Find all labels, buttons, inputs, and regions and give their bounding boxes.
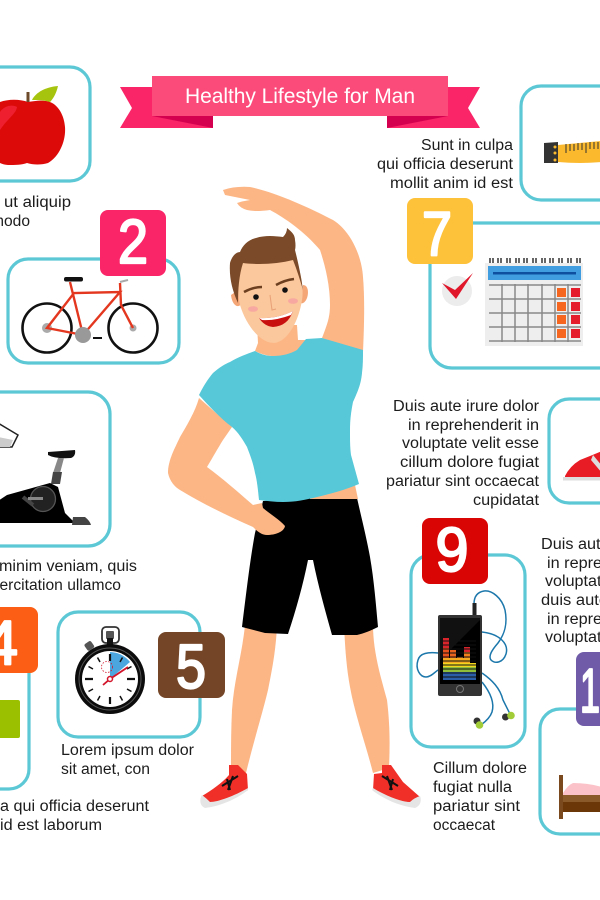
text: sneaker caption: cupidatat (473, 492, 540, 509)
legs (231, 625, 277, 773)
text: tape caption (377, 137, 514, 192)
panel: sneaker (549, 399, 600, 503)
lowered arm (168, 398, 285, 535)
title banner: Healthy Lifestyle for Man (185, 85, 415, 108)
badge: 7 (407, 198, 473, 269)
badge: 9 (422, 516, 488, 585)
man figure (168, 187, 421, 808)
text: exercise bike caption (0, 558, 137, 594)
text: tape caption: mollit anim id est (390, 175, 514, 192)
icon: earphone cable (417, 591, 510, 725)
left sneaker (200, 765, 248, 808)
text: right edge caption (541, 536, 600, 646)
head (230, 228, 308, 343)
panel: apple (0, 67, 90, 181)
text: music caption: pariatur sint (433, 798, 521, 815)
icon: calendar sheet (485, 258, 583, 346)
badge: 2: 2 (118, 208, 148, 277)
text: apple caption (0, 194, 71, 230)
panel: stopwatch (58, 612, 200, 737)
text: tape caption: Sunt in culpa (421, 137, 513, 154)
neck (255, 325, 306, 356)
text: music caption: Cillum dolore (433, 760, 527, 777)
shorts (242, 497, 378, 635)
title banner (120, 76, 480, 128)
panel: food (0, 620, 29, 789)
badge: 2 (100, 208, 166, 277)
text: food caption: a qui officia deserunt (0, 798, 150, 815)
badge: 9: 9 (436, 516, 468, 585)
text: exercise bike caption: minim veniam, quis (0, 558, 137, 575)
text: sneaker caption (386, 398, 540, 509)
text: sneaker caption: Duis aute irure dolor (393, 398, 539, 415)
panel: bicycle (8, 259, 179, 363)
text: music caption: fugiat nulla (433, 779, 512, 796)
text: food caption (0, 798, 150, 834)
text: tape caption: qui officia deserunt (377, 156, 514, 173)
icon: earbuds (474, 712, 515, 729)
text: sneaker caption: voluptate velit esse (402, 435, 539, 452)
icon: equalizer (443, 638, 476, 680)
badge: 5 (158, 632, 225, 702)
icon: phone (438, 603, 482, 696)
badge: 5: 5 (176, 633, 206, 702)
panel: music player (411, 555, 525, 747)
badge: 4 (0, 607, 38, 678)
text: sneaker caption: cillum dolore fugiat (400, 454, 540, 471)
text: apple caption: ut aliquip (4, 194, 71, 211)
text: stopwatch caption (61, 742, 194, 778)
text: music caption (433, 760, 527, 834)
waist (310, 485, 358, 499)
text: sneaker caption: pariatur sint occaecat (386, 473, 540, 490)
icon: check mark (442, 273, 473, 306)
text: stopwatch caption: Lorem ipsum dolor (61, 742, 194, 759)
panel: measuring tape (521, 86, 600, 200)
badge: 7: 7 (422, 200, 452, 269)
text: music caption: occaecat (433, 817, 496, 834)
right sneaker (372, 765, 421, 808)
text: stopwatch caption: sit amet, con (61, 761, 150, 778)
shirt (199, 338, 363, 502)
panel: exercise bike (0, 392, 110, 546)
text: sneaker caption: in reprehenderit in (408, 417, 539, 434)
text: food caption: id est laborum (0, 817, 102, 834)
panel: bed (540, 709, 600, 834)
panel: calendar (430, 223, 600, 368)
raised arm (223, 187, 364, 352)
